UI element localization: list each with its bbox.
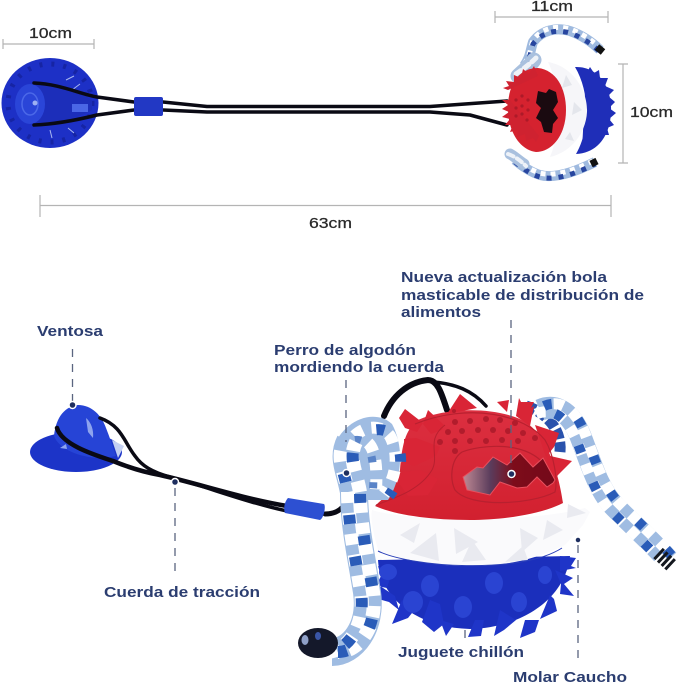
- top view: upper rope: [516, 27, 603, 76]
- label: Nueva actualización: alimentos: [401, 305, 481, 321]
- dimension: suction cup width: 10cm: [29, 26, 72, 42]
- label: Juguete chillón: [398, 630, 524, 661]
- bottom view: cord connector: [284, 498, 325, 520]
- label: Perro de algodón: Perro de algodón: [274, 343, 416, 359]
- bottom view: pull cord: [57, 418, 346, 514]
- dimension: total length: 63cm: [309, 216, 352, 232]
- rope strand behind ball: [526, 406, 560, 452]
- ball mouth: [463, 453, 555, 495]
- label: Perro de algodón: mordiendo la cuerda: [274, 360, 445, 376]
- label: Nueva actualización: Nueva actualización bola: [401, 270, 608, 286]
- dimension: ball height: 10cm: [630, 105, 673, 121]
- callout dots: [69, 402, 581, 543]
- left rope, upper loop: [334, 417, 401, 500]
- top view: ball: [502, 62, 616, 157]
- left rope: [326, 442, 374, 652]
- ball: blue squeaky half: [375, 556, 576, 638]
- dimension: ball height: [618, 64, 673, 163]
- ball top loop cord: [384, 380, 486, 416]
- dimension: suction cup width: [3, 26, 94, 49]
- label: Perro de algodón: [274, 343, 445, 442]
- top view: cord connector: [134, 97, 163, 116]
- top view: pull cord: [34, 83, 507, 125]
- label: Juguete chillón: Juguete chillón: [398, 645, 524, 661]
- label: Cuerda de tracción: Cuerda de tracción: [104, 585, 260, 601]
- ball: red dome: [375, 394, 572, 520]
- left rope end knot: [298, 628, 338, 658]
- label: Nueva actualización: masticable de distribución de: [401, 288, 644, 304]
- dimension: total length: [40, 195, 611, 232]
- label: Ventosa: [37, 324, 104, 402]
- top view: lower rope: [508, 154, 597, 178]
- bottom view: suction cup: [30, 405, 124, 472]
- label: Nueva actualización: [401, 270, 644, 470]
- label: Ventosa: Ventosa: [37, 324, 104, 340]
- top view: suction cup: [2, 58, 98, 148]
- dimension: ball width: [495, 0, 608, 23]
- right rope: [536, 404, 672, 566]
- ball: white molar band: [371, 504, 590, 566]
